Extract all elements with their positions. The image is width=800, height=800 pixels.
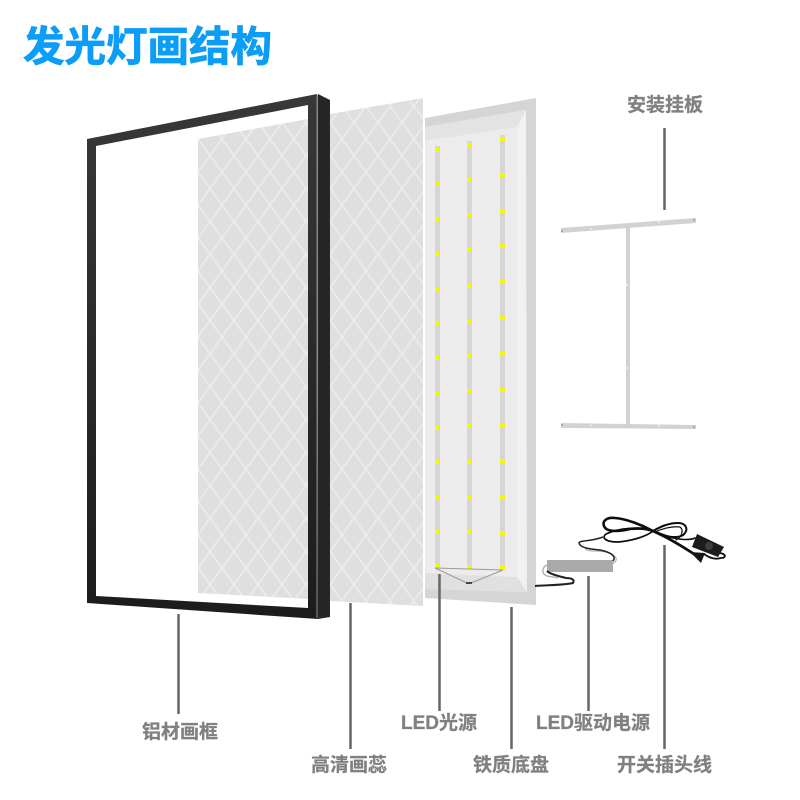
- power cord with switch and plug: [604, 518, 725, 563]
- switch body: [692, 534, 724, 557]
- frame side: [318, 94, 330, 619]
- LED driver box: [547, 560, 613, 572]
- LED dots right: [500, 137, 505, 570]
- label: LED source: LED光源: [401, 712, 477, 734]
- leader: frame: [177, 614, 180, 714]
- tray inner floor: [425, 127, 517, 577]
- panel: diffuser sheet: [198, 98, 423, 606]
- panel: mounting plate: [561, 218, 696, 429]
- frame front: [87, 94, 318, 619]
- cord right loop: [653, 523, 686, 537]
- driver output wires: [579, 537, 616, 564]
- label: tray: 铁质底盘: [473, 753, 549, 776]
- cord lower loop: [604, 528, 653, 542]
- frame edge highlight: [316, 95, 318, 618]
- leader: tray: [510, 607, 513, 749]
- diffuser right of frame: [330, 98, 423, 606]
- cord upper loop: [604, 518, 653, 531]
- leader: driver: [587, 576, 590, 711]
- LED dots middle: [467, 143, 471, 569]
- tray bottom bevel: [425, 573, 527, 592]
- LED strips: [435, 135, 505, 570]
- label: driver: LED驱动电源: [536, 712, 650, 734]
- plate end screws: [561, 219, 695, 428]
- cord to switch: [668, 537, 695, 540]
- cord second right loop: [655, 527, 682, 540]
- diffuser seen through frame: [198, 119, 308, 599]
- panel: iron tray: [425, 98, 536, 605]
- tray outer: [425, 98, 536, 605]
- wire connector: [466, 582, 472, 584]
- LED dots left: [435, 148, 439, 568]
- plate screw holes: [590, 221, 660, 427]
- leader: LED source: [438, 574, 441, 711]
- label: frame: 铝材画框: [142, 720, 218, 743]
- tray bevel: [425, 110, 527, 592]
- plate bottom bar: [561, 423, 696, 429]
- leader: cord: [663, 545, 666, 749]
- cord after switch: [704, 553, 725, 559]
- leader: mounting plate: [663, 128, 666, 210]
- tray top bevel: [425, 110, 526, 141]
- cord to plug: [653, 531, 697, 556]
- title: 发光灯画结构: [23, 23, 272, 70]
- driver input wire: [535, 571, 574, 586]
- panel: aluminium frame: [87, 94, 330, 619]
- plate vertical bar: [626, 226, 630, 425]
- driver white wire: [543, 565, 558, 578]
- label: mounting plate: 安装挂板: [627, 94, 703, 116]
- label: cord: 开关插头线: [617, 754, 712, 776]
- switch knob: [705, 542, 713, 550]
- strip connection wires: [435, 568, 503, 583]
- label: diffuser: 高清画蕊: [311, 753, 387, 776]
- plug body: [690, 552, 705, 563]
- leader: diffuser: [349, 603, 352, 749]
- plate top bar: [561, 218, 696, 233]
